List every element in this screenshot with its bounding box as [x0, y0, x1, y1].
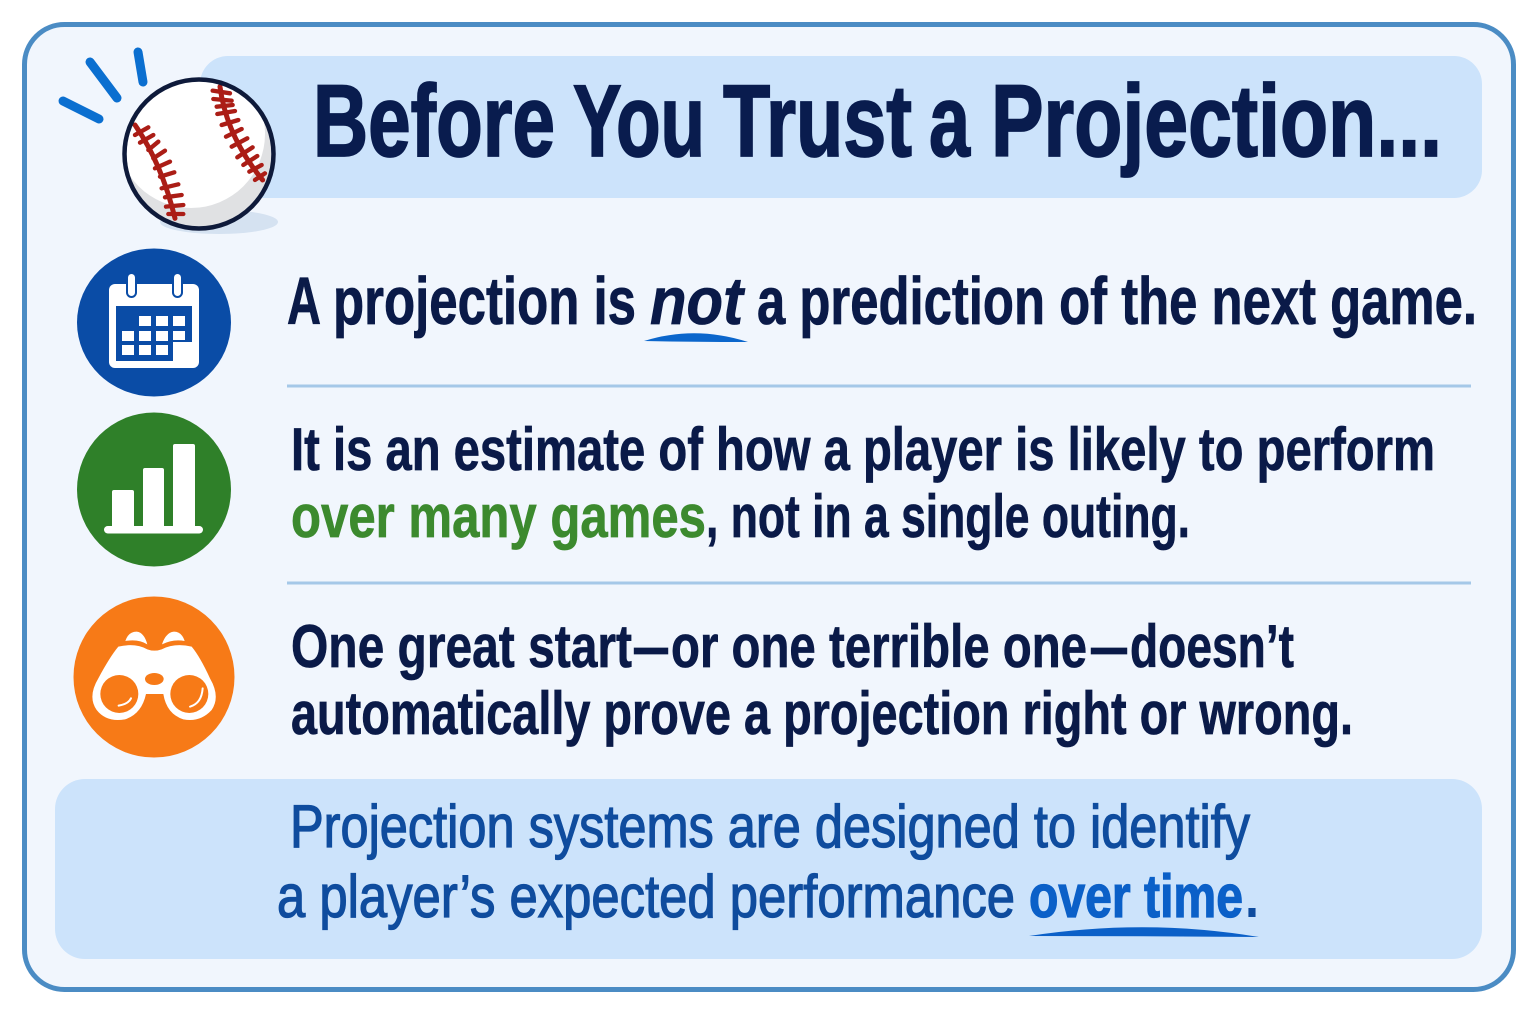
title: Trust: [723, 64, 912, 178]
icon: binoculars: [74, 596, 234, 758]
bottom callout panel: over time: [1029, 863, 1243, 930]
title: a: [929, 64, 971, 178]
icon: baseball with motion ticks: [63, 52, 278, 234]
bottom callout panel: a player’s expected performance: [277, 863, 1015, 930]
text: line three: doesn’t: [1130, 613, 1294, 680]
bottom callout panel: [55, 779, 1482, 959]
icon: calendar: [77, 248, 231, 396]
text: line one: projection is: [333, 264, 636, 339]
text: line three: or one terrible one: [671, 613, 1087, 680]
text: line two: over many games: [291, 483, 706, 550]
underline: not: [644, 333, 748, 342]
text: line one: A: [287, 264, 321, 339]
title: Before: [313, 64, 555, 178]
text: line two: [291, 416, 1435, 550]
title banner: [200, 56, 1482, 198]
icon: bar chart: [77, 412, 231, 566]
text: line three: —: [634, 613, 668, 680]
text: line one: not: [650, 264, 745, 339]
text: line three: [291, 613, 1353, 747]
bottom callout panel: Projection systems are designed to identify: [290, 793, 1250, 860]
text: line three: —: [1091, 613, 1127, 680]
text: line three: One great start: [291, 613, 632, 680]
text: line one: [287, 264, 1477, 339]
title: You: [573, 64, 705, 178]
title: [313, 64, 1442, 178]
bottom callout panel: .: [1245, 863, 1259, 930]
text: line two: , not in a single outing.: [706, 483, 1190, 550]
